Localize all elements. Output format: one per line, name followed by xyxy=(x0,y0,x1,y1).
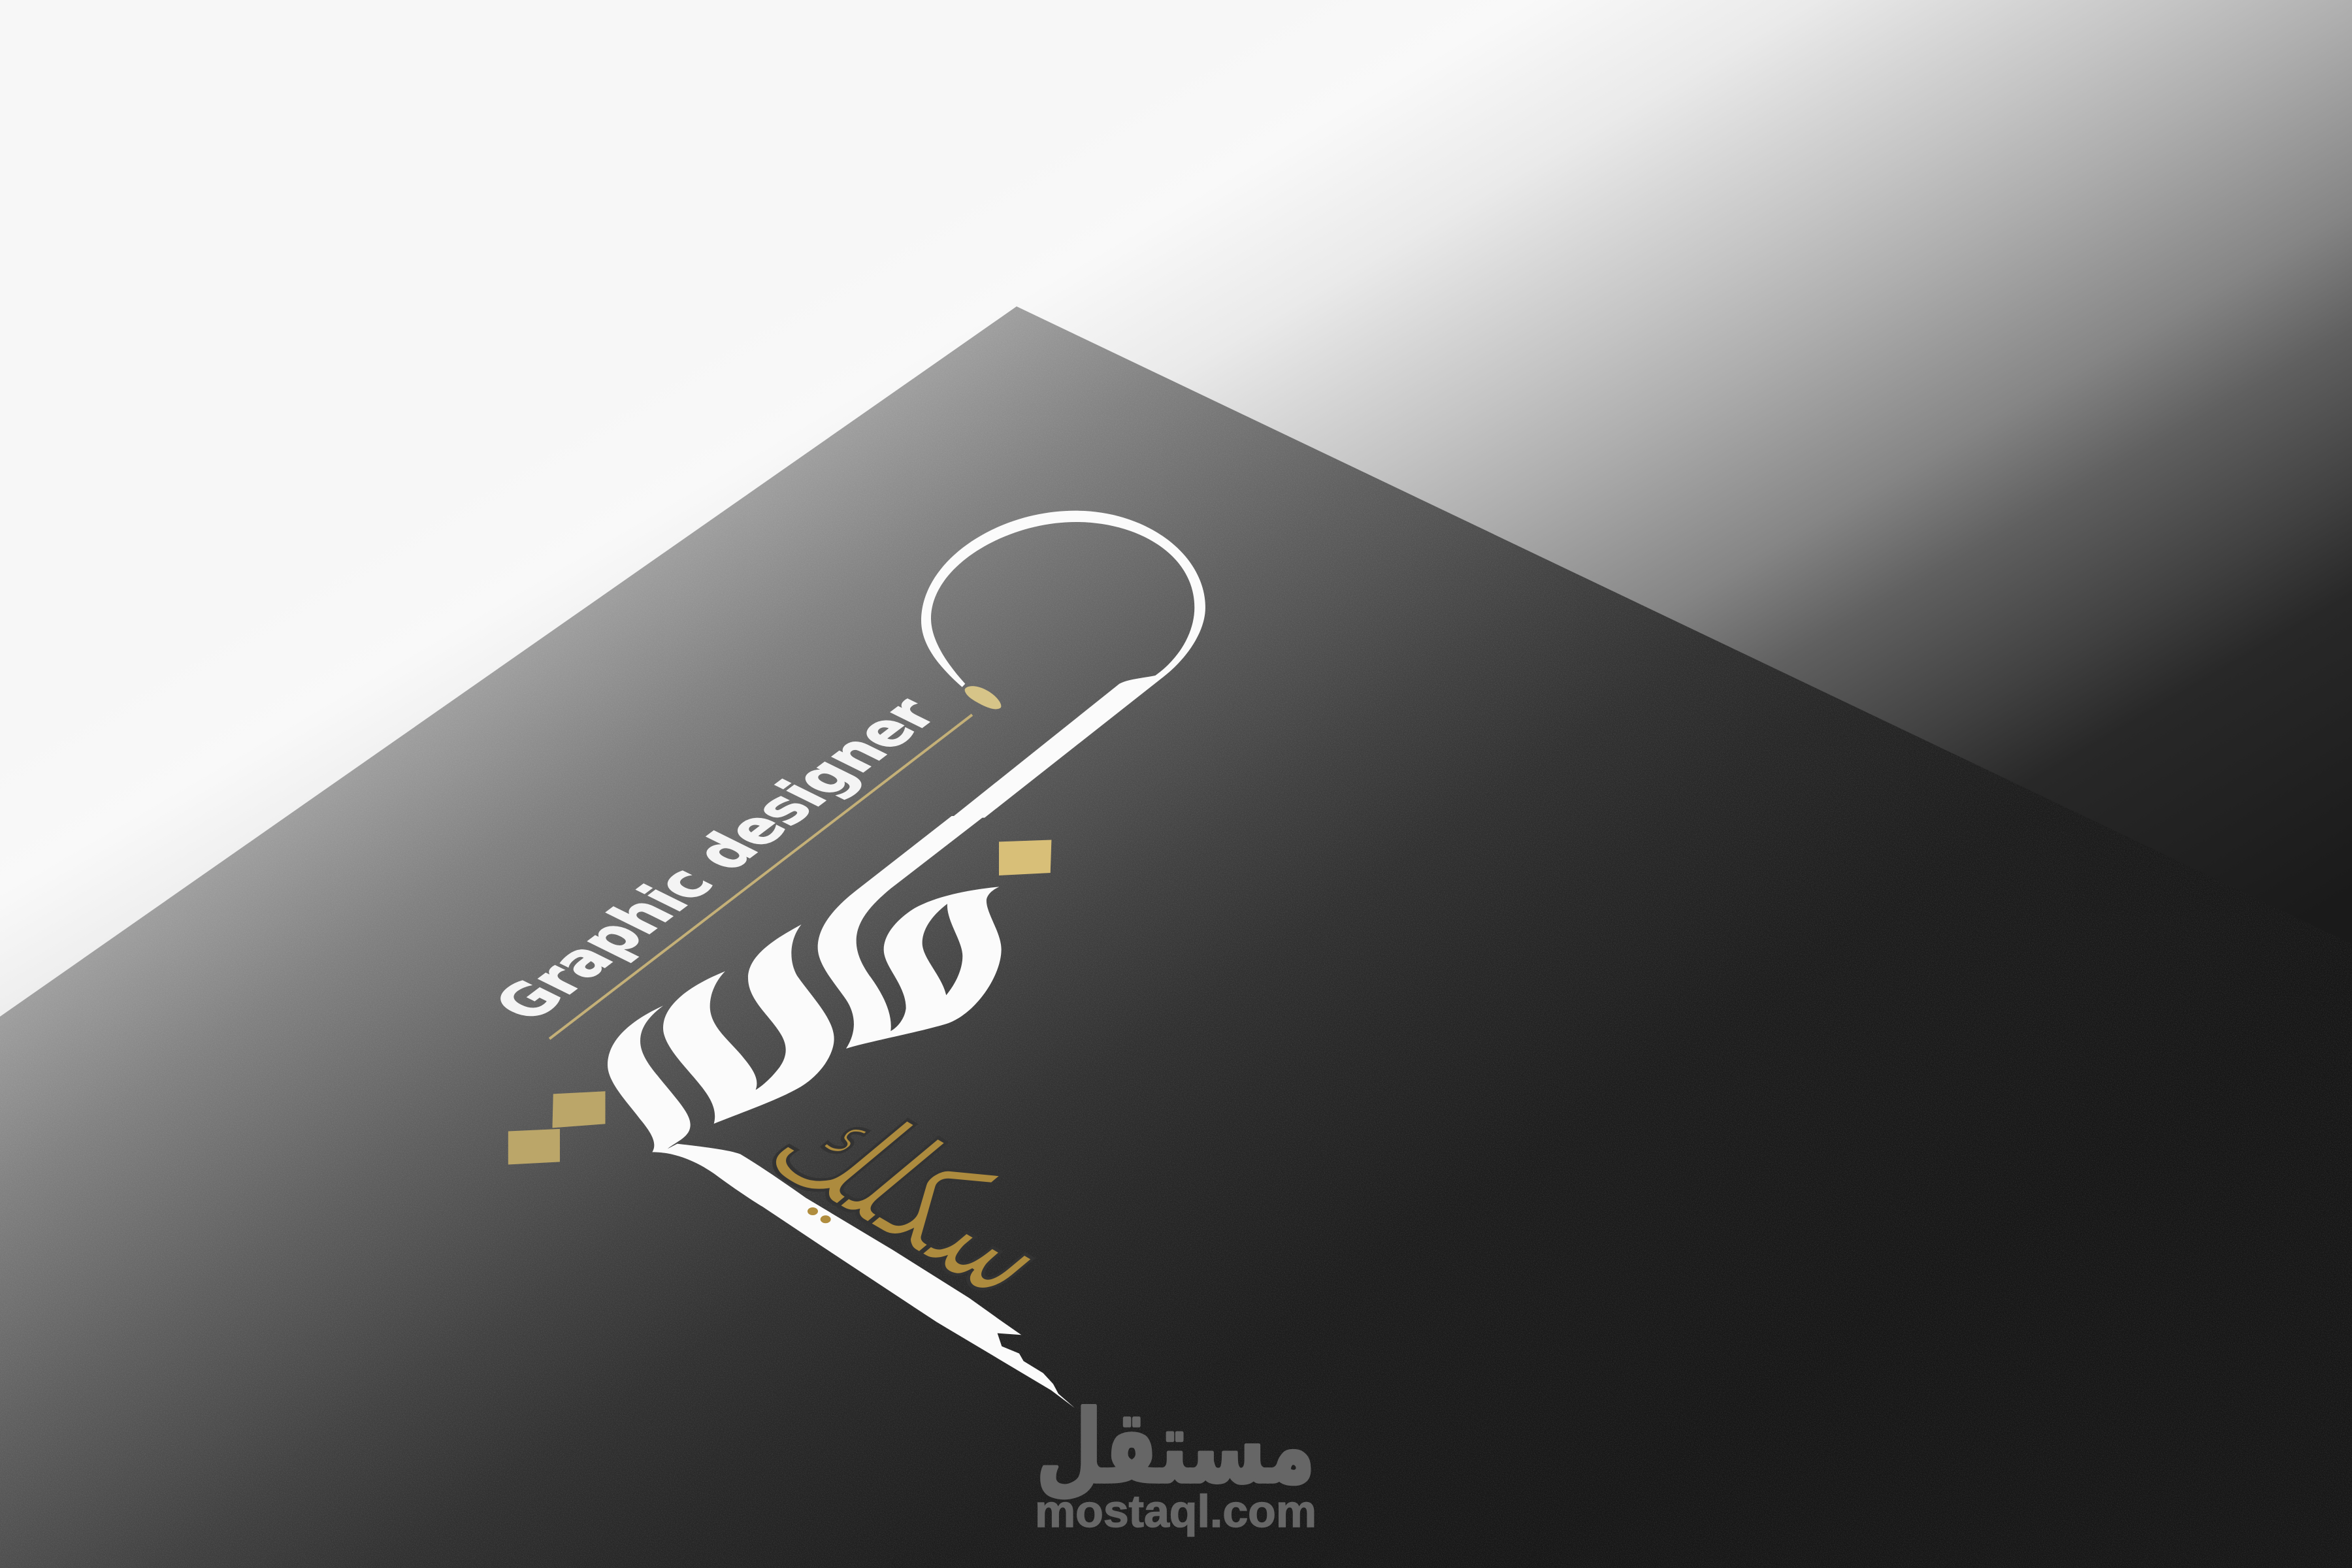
icon: middle bowl of the calligraphic mark xyxy=(663,924,834,1124)
tagline text: Graphic designer: Graphic designer xyxy=(480,689,953,1030)
watermark: mostaql.com: mostaql.com xyxy=(1035,1486,1316,1537)
watermark: mostaql arabic wordmark: مستقل xyxy=(1036,1390,1315,1506)
icon: right wave and leaf lobe with inner counter xyxy=(818,816,1002,1049)
icon: left wave and long tapered stroke xyxy=(608,1005,1075,1408)
icon: gold dots on the stroke xyxy=(808,1207,831,1223)
icon: gold diamond top xyxy=(999,840,1051,875)
gold arabic word: سكلك xyxy=(731,1069,1107,1322)
icon: gold drop at ring end xyxy=(965,686,1001,709)
icon: gold diamond pair xyxy=(508,1091,605,1164)
divider: gold line under tagline xyxy=(549,715,972,1039)
logo: calligraphic mark xyxy=(508,511,1205,1408)
icon: ring and shaft of the calligraphic stroke xyxy=(921,511,1205,818)
